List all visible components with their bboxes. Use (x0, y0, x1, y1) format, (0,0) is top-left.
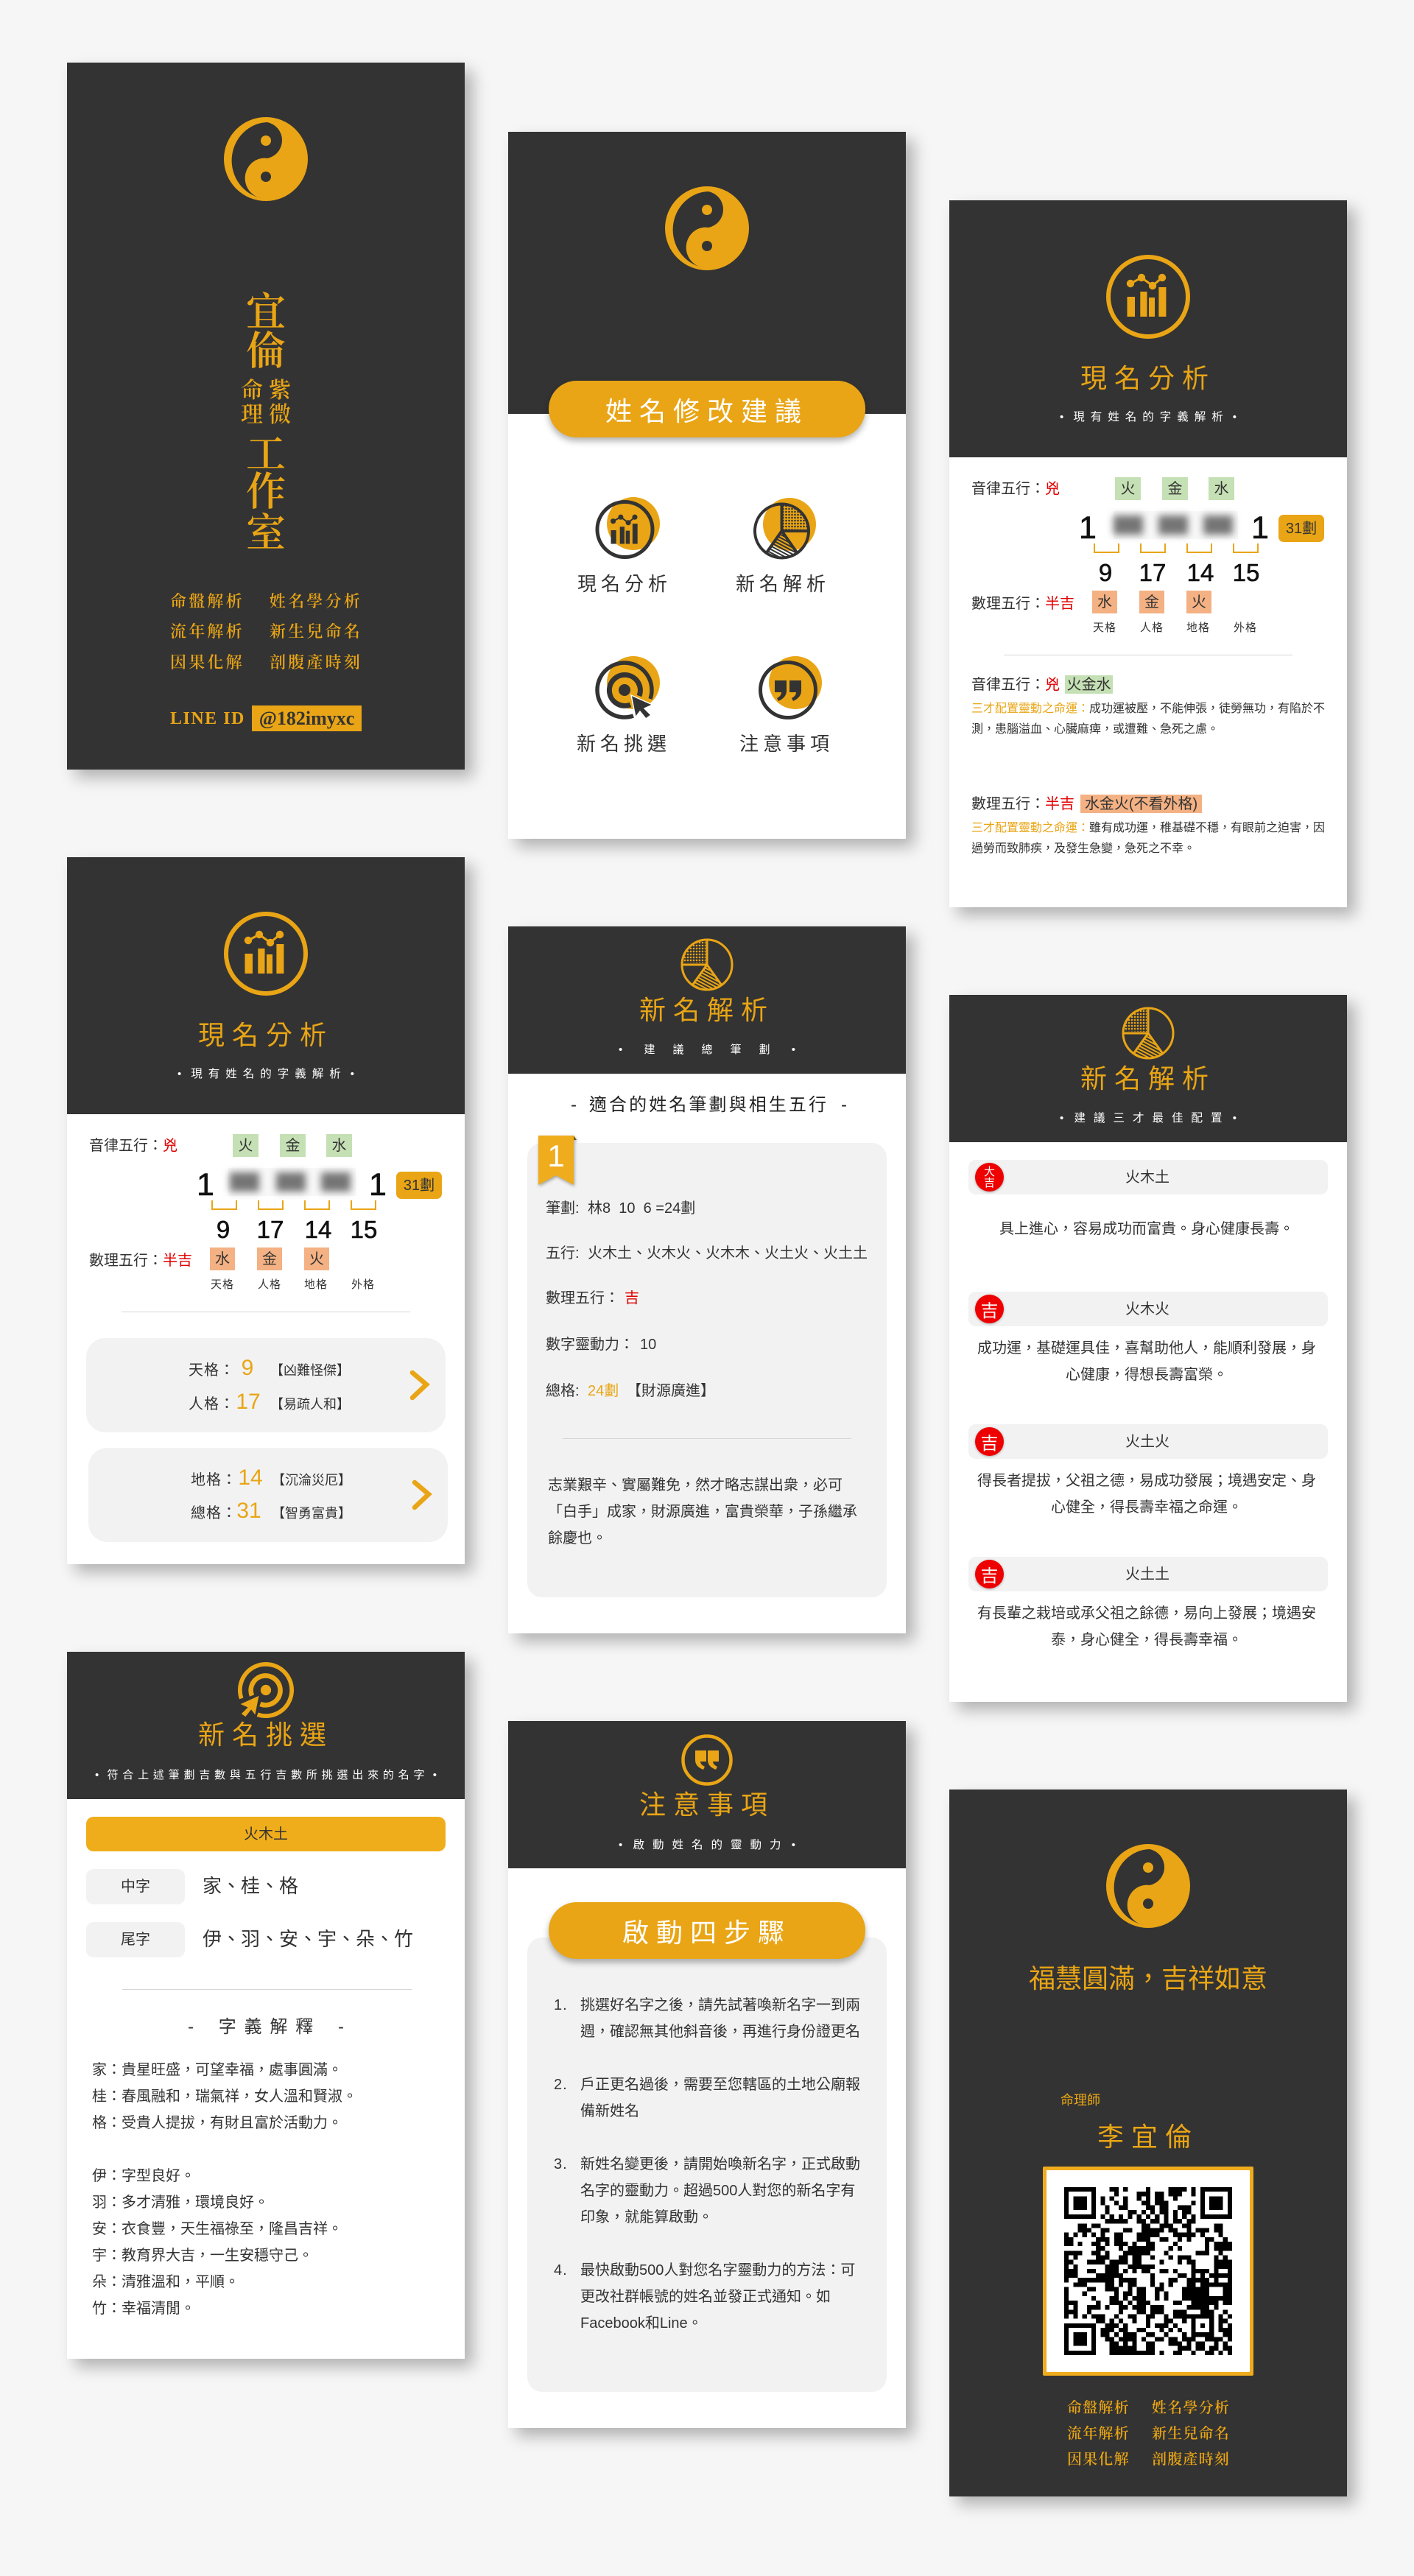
icon: yin-yang (1104, 1842, 1192, 1930)
list text: 戶正更名過後，需要至您轄區的土地公廟報 (580, 2077, 860, 2093)
number: 1 (1079, 510, 1097, 545)
heading pill (549, 381, 865, 437)
caption: 地格 (1186, 622, 1210, 633)
subheading: 現有姓名的字義解析 (191, 1068, 347, 1080)
description: 成功運，基礎運具佳，喜幫助他人，能順利發展，身 (977, 1340, 1316, 1356)
panel: new name analysis 1: 吉 (625, 1290, 639, 1306)
text block: meanings: 羽：多才清雅，環境良好。 (92, 2195, 269, 2211)
text block: services: 流年解析 (1067, 2426, 1130, 2442)
tag (326, 1134, 352, 1157)
heading: 新名解析 (1080, 1063, 1216, 1094)
text block: sound analysis (971, 675, 1325, 736)
subheading: • (177, 1068, 181, 1080)
menu item: new name analysis icon (753, 498, 816, 560)
row: 火木土 (968, 1160, 1328, 1194)
subheading: • (619, 1043, 622, 1056)
tag: 火 (239, 1137, 253, 1153)
subheading: 建議總筆劃 (644, 1043, 788, 1056)
row: 火土土 (968, 1557, 1328, 1591)
text block: sound analysis: 音律五行：兇 (971, 677, 1060, 693)
description: 心健康，得想長壽富榮。 (1066, 1367, 1228, 1383)
subheading: • (619, 1838, 622, 1851)
number: 9 (1099, 558, 1112, 586)
label: sound five elements: 音律五行：兇 (89, 1138, 177, 1154)
label: middle character (86, 1869, 185, 1904)
list text (580, 1992, 860, 2337)
list numbers: 3. (554, 2156, 568, 2172)
heading: 注意事項 (639, 1790, 775, 1820)
tag: 金 (286, 1137, 300, 1153)
list text: Facebook和Line。 (580, 2315, 703, 2332)
text: middle characters: 家、桂、格 (203, 1875, 298, 1897)
paragraph (548, 1477, 857, 1546)
description: 泰，身心健全，得長壽幸福。 (1051, 1632, 1242, 1648)
description: 具上進心，容易成功而富貴。身心健康長壽。 (999, 1221, 1294, 1237)
number: 17 (257, 1215, 284, 1243)
number: 1 (369, 1166, 387, 1202)
subheading: • (95, 1769, 99, 1781)
text block: numeric analysis (971, 795, 1325, 855)
caption: 外格 (1234, 622, 1257, 633)
icon: pie chart (1122, 1007, 1174, 1059)
row: 火木火 (968, 1292, 1328, 1326)
row: total pattern (546, 1383, 715, 1399)
number: 9 (217, 1215, 230, 1243)
tag: 火 (1192, 594, 1206, 610)
menu item: notes icon (759, 656, 822, 719)
card: heaven and human pattern (86, 1338, 446, 1432)
number: 15 (351, 1215, 377, 1243)
heading pill: 姓名修改建議 (605, 396, 809, 426)
text block: sound analysis: 三才配置靈動之命運：成功運被壓，不能伸張，徒勞無功，有陷於不 (971, 703, 1325, 715)
tag: 金 (262, 1250, 277, 1267)
caption: 人格 (258, 1278, 281, 1290)
list numbers: 1. (554, 1997, 568, 2013)
header band (508, 1721, 906, 1868)
text block: sound analysis: 測，患腦溢血、心臟麻痺，或遭難、急死之慮。 (971, 723, 1219, 736)
tag: 金 (1168, 480, 1183, 496)
text: LINE ID value: @182imyxc (259, 707, 354, 729)
text block: meanings: 竹：幸福清閒。 (92, 2301, 195, 2317)
subheading: • (351, 1068, 354, 1080)
description: 有長輩之栽培或承父祖之餘德，易向上發展；境遇安 (977, 1605, 1316, 1622)
brackets (211, 1200, 376, 1210)
icon: chart in ring (224, 912, 308, 996)
tag: 火 (309, 1250, 324, 1267)
subheading: • (1233, 1112, 1237, 1124)
panel: new name analysis 1 (508, 926, 906, 1633)
label: numeric five elements: 數理五行：半吉 (971, 596, 1074, 612)
card: heaven and human pattern: 【凶難怪傑】 (270, 1363, 350, 1378)
menu item: name selection icon (595, 656, 660, 719)
icon: chart in ring (1106, 255, 1190, 339)
tag (1092, 591, 1117, 613)
badge: fortune: 吉 (981, 1566, 999, 1586)
tag: 水 (1214, 480, 1228, 496)
text block: services (1067, 2397, 1231, 2471)
section title: - (188, 2017, 194, 2037)
caption: 天格 (211, 1278, 234, 1290)
number: 14 (1187, 558, 1214, 586)
badge: fortune (975, 1560, 1004, 1588)
text block: services: 命盤解析 (1067, 2400, 1130, 2416)
description: 心健全，得長壽幸福之命運。 (1051, 1499, 1242, 1516)
badge: total strokes (1278, 515, 1324, 542)
QR code (1043, 2167, 1253, 2376)
tag (280, 1134, 306, 1157)
paragraph: 「白手」成家，財源廣進，富貴榮華，子孫繼承 (548, 1504, 857, 1520)
description (977, 1340, 1316, 1383)
text block: services: 剖腹產時刻 (270, 653, 362, 672)
text block: services: 新生兒命名 (1152, 2426, 1230, 2442)
blurred name (228, 1168, 356, 1196)
brackets (1094, 543, 1259, 553)
list numbers: 4. (554, 2262, 568, 2278)
card: heaven and human pattern: 9 (242, 1356, 253, 1380)
panel: steps background (527, 1938, 887, 2392)
caption: 人格 (1140, 622, 1164, 633)
list text: 最快啟動500人對您名字靈動力的方法：可 (580, 2262, 855, 2278)
text block: services: 流年解析 (170, 622, 245, 641)
ribbon badge: 1 (547, 1139, 565, 1173)
icon: yin-yang (224, 117, 308, 201)
tag (210, 1247, 235, 1270)
card: earth and total pattern: 31 (236, 1499, 261, 1523)
tag (304, 1247, 329, 1270)
text block: numeric analysis: 過勞而致肺疾，及發生急變，急死之不幸。 (971, 842, 1195, 855)
description (977, 1605, 1316, 1648)
panel: new name analysis 1: 【財源廣進】 (627, 1383, 715, 1399)
tag: 金 (1144, 594, 1159, 610)
icon: yin-yang (665, 186, 749, 270)
text block: meanings: 桂：春風融和，瑞氣祥，女人溫和賢淑。 (92, 2088, 357, 2105)
badge: fortune: 吉 (981, 1434, 999, 1454)
text block: services: 剖腹產時刻 (1152, 2452, 1230, 2468)
badge: fortune: 吉 (981, 1301, 999, 1321)
subheading: • (792, 1838, 795, 1851)
row: five elements (546, 1245, 868, 1261)
card: heaven and human pattern: 天格： (189, 1362, 235, 1379)
number: 15 (1233, 558, 1259, 586)
description: 得長者提拔，父祖之德，易成功發展；境遇安定、身 (977, 1473, 1316, 1489)
text block: meanings: 安：衣食豐，天生福祿至，隆昌吉祥。 (92, 2221, 342, 2237)
title: studio name vertical: 命 (241, 379, 263, 403)
card: earth and total pattern: 總格： (191, 1505, 237, 1521)
text block: numeric analysis: 三才配置靈動之命運：雖有成功運，稚基礎不穩，有眼前之迫害，因 (971, 822, 1325, 834)
caption: 地格 (304, 1278, 328, 1290)
title: studio name vertical: 微 (269, 403, 291, 427)
label: numeric five elements: 數理五行：半吉 (89, 1253, 192, 1269)
tag (1209, 477, 1234, 500)
badge: total strokes: 31劃 (1286, 520, 1317, 536)
card: heaven and human pattern: 17 (236, 1390, 261, 1414)
menu label: 新名解析 (736, 573, 830, 595)
menu item: current name analysis icon (595, 497, 660, 559)
tag (1115, 477, 1141, 500)
subheading: • (433, 1769, 437, 1781)
card: earth and total pattern: 地格： (191, 1472, 237, 1488)
menu label: 現名分析 (577, 573, 672, 595)
section title: 適合的姓名筆劃與相生五行 (589, 1095, 829, 1115)
section title: - (841, 1095, 847, 1115)
caption: role: 命理師 (1060, 2093, 1100, 2108)
panel: new name analysis 2 (949, 995, 1347, 1702)
bar: selected elements: 火木土 (244, 1826, 288, 1843)
text block: services: 因果化解 (1067, 2452, 1130, 2468)
section title (188, 2017, 344, 2037)
bar: selected elements (86, 1817, 446, 1851)
panel: new name analysis 1: 24劃 (588, 1383, 619, 1399)
panel: menu card (508, 132, 906, 839)
card: earth and total pattern: 14 (238, 1465, 263, 1490)
text: LINE ID label: LINE ID (170, 709, 245, 728)
row: 火土火: 火土火 (1125, 1434, 1169, 1450)
heading: 現名分析 (198, 1020, 334, 1050)
text block: meanings: 家：貴星旺盛，可望幸福，處事圓滿。 (92, 2062, 342, 2078)
panel: new name analysis 1: 林8 10 6 =24劃 (588, 1200, 695, 1217)
title: studio name vertical: 紫 (269, 379, 291, 403)
header band (67, 857, 465, 1114)
text block: meanings: 伊：字型良好。 (92, 2168, 195, 2184)
tag (1162, 477, 1188, 500)
text: last characters: 伊、羽、安、宇、朵、竹 (203, 1928, 413, 1950)
list text: 名字的靈動力。超過500人對您的新名字有 (580, 2183, 855, 2199)
title: studio name vertical: 倫 (246, 328, 286, 373)
panel: current name analysis 2 (67, 857, 465, 1564)
panel: cover card (67, 63, 465, 770)
panel: notes (508, 1721, 906, 2428)
badge: great fortune (975, 1163, 1004, 1192)
heading: 新名挑選 (198, 1720, 334, 1750)
panel: new name analysis 1: 火木土、火木火、火木木、火土火、火土土 (588, 1245, 868, 1261)
list text: 挑選好名字之後，請先試著喚新名字一到兩 (580, 1997, 860, 2013)
section title: 字義解釋 (219, 2017, 321, 2037)
subheading: 現有姓名的字義解析 (1073, 411, 1229, 423)
text block: meanings: 宇：教育界大吉，一生安穩守己。 (92, 2248, 313, 2264)
list text: 新姓名變更後，請開始喚新名字，正式啟動 (580, 2156, 860, 2172)
title: studio name vertical: 理 (241, 403, 263, 427)
tag (1186, 591, 1211, 613)
subheading: 建議三才最佳配置 (1074, 1112, 1230, 1124)
badge: total strokes: 31劃 (404, 1177, 435, 1193)
text block: services: 姓名學分析 (270, 592, 362, 610)
badge: fortune (975, 1427, 1004, 1456)
list text: 更改社群帳號的姓名並發正式通知。如 (580, 2289, 831, 2305)
heading pill: 啟動四步驟 (622, 1918, 792, 1947)
section title: - (571, 1095, 577, 1115)
label: last character (86, 1922, 185, 1957)
card: heaven and human pattern: 【易疏人和】 (270, 1397, 350, 1412)
list numbers: 2. (554, 2077, 568, 2093)
text block: services: 因果化解 (170, 653, 245, 672)
panel: closing card (949, 1790, 1347, 2496)
name: 李宜倫 (1097, 2122, 1199, 2152)
caption: 外格 (351, 1278, 375, 1290)
tag (257, 1247, 282, 1270)
text block: services: 新生兒命名 (270, 622, 362, 641)
menu label: 新名挑選 (577, 733, 671, 755)
card: heaven and human pattern: 人格： (189, 1396, 235, 1412)
title: studio name vertical: 室 (246, 511, 286, 555)
list text: 備新姓名 (580, 2103, 639, 2119)
row: five elements: 五行: (546, 1245, 580, 1261)
header band (67, 1652, 465, 1799)
title: studio name vertical (241, 290, 291, 555)
description (977, 1473, 1316, 1516)
subheading: • (792, 1043, 795, 1056)
badge: great fortune: 大 (984, 1165, 995, 1178)
menu label: 注意事項 (739, 733, 834, 755)
section title: - (338, 2017, 344, 2037)
row: strokes: 筆劃: (546, 1200, 580, 1217)
row: 火木土: 火木土 (1125, 1169, 1169, 1186)
badge: fortune (975, 1295, 1004, 1323)
row: 火土火 (968, 1424, 1328, 1459)
tag (233, 1134, 258, 1157)
label: middle character: 中字 (121, 1879, 150, 1895)
number: 1 (197, 1166, 214, 1202)
text block: meanings (92, 2062, 357, 2317)
text block: services: 命盤解析 (170, 592, 245, 610)
card: earth and total pattern: 【智勇富貴】 (272, 1506, 351, 1521)
badge: great fortune: 吉 (984, 1177, 995, 1189)
row: numeric five elements: 數理五行： (546, 1290, 619, 1306)
caption: 天格 (1093, 622, 1116, 633)
icon: pie chart (680, 938, 734, 991)
list text: 週，確認無其他斜音後，再進行身份證更名 (580, 2024, 860, 2040)
row: total pattern: 總格: (546, 1383, 580, 1399)
paragraph: 志業艱辛、實屬難免，然才略志謀出衆，必可 (548, 1477, 843, 1493)
heading: 新名解析 (639, 995, 775, 1025)
row: 火土土: 火土土 (1125, 1566, 1169, 1583)
title: studio name vertical: 作 (246, 470, 286, 514)
text block: meanings: 朵：清雅溫和，平順。 (92, 2274, 239, 2290)
tag: 水 (215, 1250, 230, 1267)
card: earth and total pattern (88, 1448, 448, 1542)
title: studio name vertical: 工 (246, 432, 286, 476)
text block: services: 姓名學分析 (1152, 2400, 1230, 2416)
header band (949, 200, 1347, 457)
header band (508, 132, 906, 414)
header band (949, 995, 1347, 1142)
tag: 水 (331, 1137, 346, 1153)
panel: current name analysis 1 (949, 200, 1347, 907)
tag: 水 (1097, 594, 1112, 610)
number: 17 (1139, 558, 1166, 586)
ribbon badge (537, 1135, 578, 1187)
label: sound five elements: 音律五行：兇 (971, 481, 1060, 497)
paragraph: 餘慶也。 (548, 1530, 607, 1546)
subheading: • (1060, 411, 1063, 423)
icon: quote in ring (681, 1734, 733, 1786)
list text: 印象，就能算啟動。 (580, 2209, 713, 2225)
heading pill (549, 1902, 865, 1959)
title: studio name vertical: 宜 (246, 290, 286, 334)
text block: numeric analysis: 水金火(不看外格) (1085, 795, 1197, 812)
header band (508, 926, 906, 1074)
number: 14 (305, 1215, 331, 1243)
number: 1 (1251, 510, 1269, 545)
text block: sound analysis: 火金水 (1066, 676, 1111, 692)
blessing text: 福慧圓滿，吉祥如意 (1029, 1963, 1267, 1993)
icon: target (238, 1662, 294, 1718)
subheading: • (1060, 1112, 1063, 1124)
row: 火木火: 火木火 (1125, 1301, 1169, 1317)
tag (1139, 591, 1164, 613)
row: strokes (546, 1200, 695, 1217)
tag: 火 (1121, 480, 1136, 496)
heading: 現名分析 (1080, 363, 1216, 393)
row: number power: 數字靈動力： 10 (546, 1337, 656, 1353)
blurred name (1114, 511, 1238, 539)
text block: numeric analysis: 數理五行：半吉 (971, 796, 1074, 812)
text block: services (170, 592, 362, 672)
subheading: 符合上述筆劃吉數與五行吉數所挑選出來的名字 (107, 1769, 429, 1781)
subheading: • (1233, 411, 1237, 423)
card: earth and total pattern: 【沉淪災厄】 (272, 1473, 351, 1488)
text block: meanings: 格：受貴人提拔，有財且富於活動力。 (92, 2115, 342, 2131)
badge: total strokes (396, 1172, 442, 1199)
panel: first suggestion (527, 1143, 887, 1597)
panel: new name selection (67, 1652, 465, 2359)
subheading: 啟動姓名的靈動力 (633, 1838, 789, 1851)
list numbers (554, 1992, 568, 2284)
label: last character: 尾字 (121, 1932, 150, 1948)
